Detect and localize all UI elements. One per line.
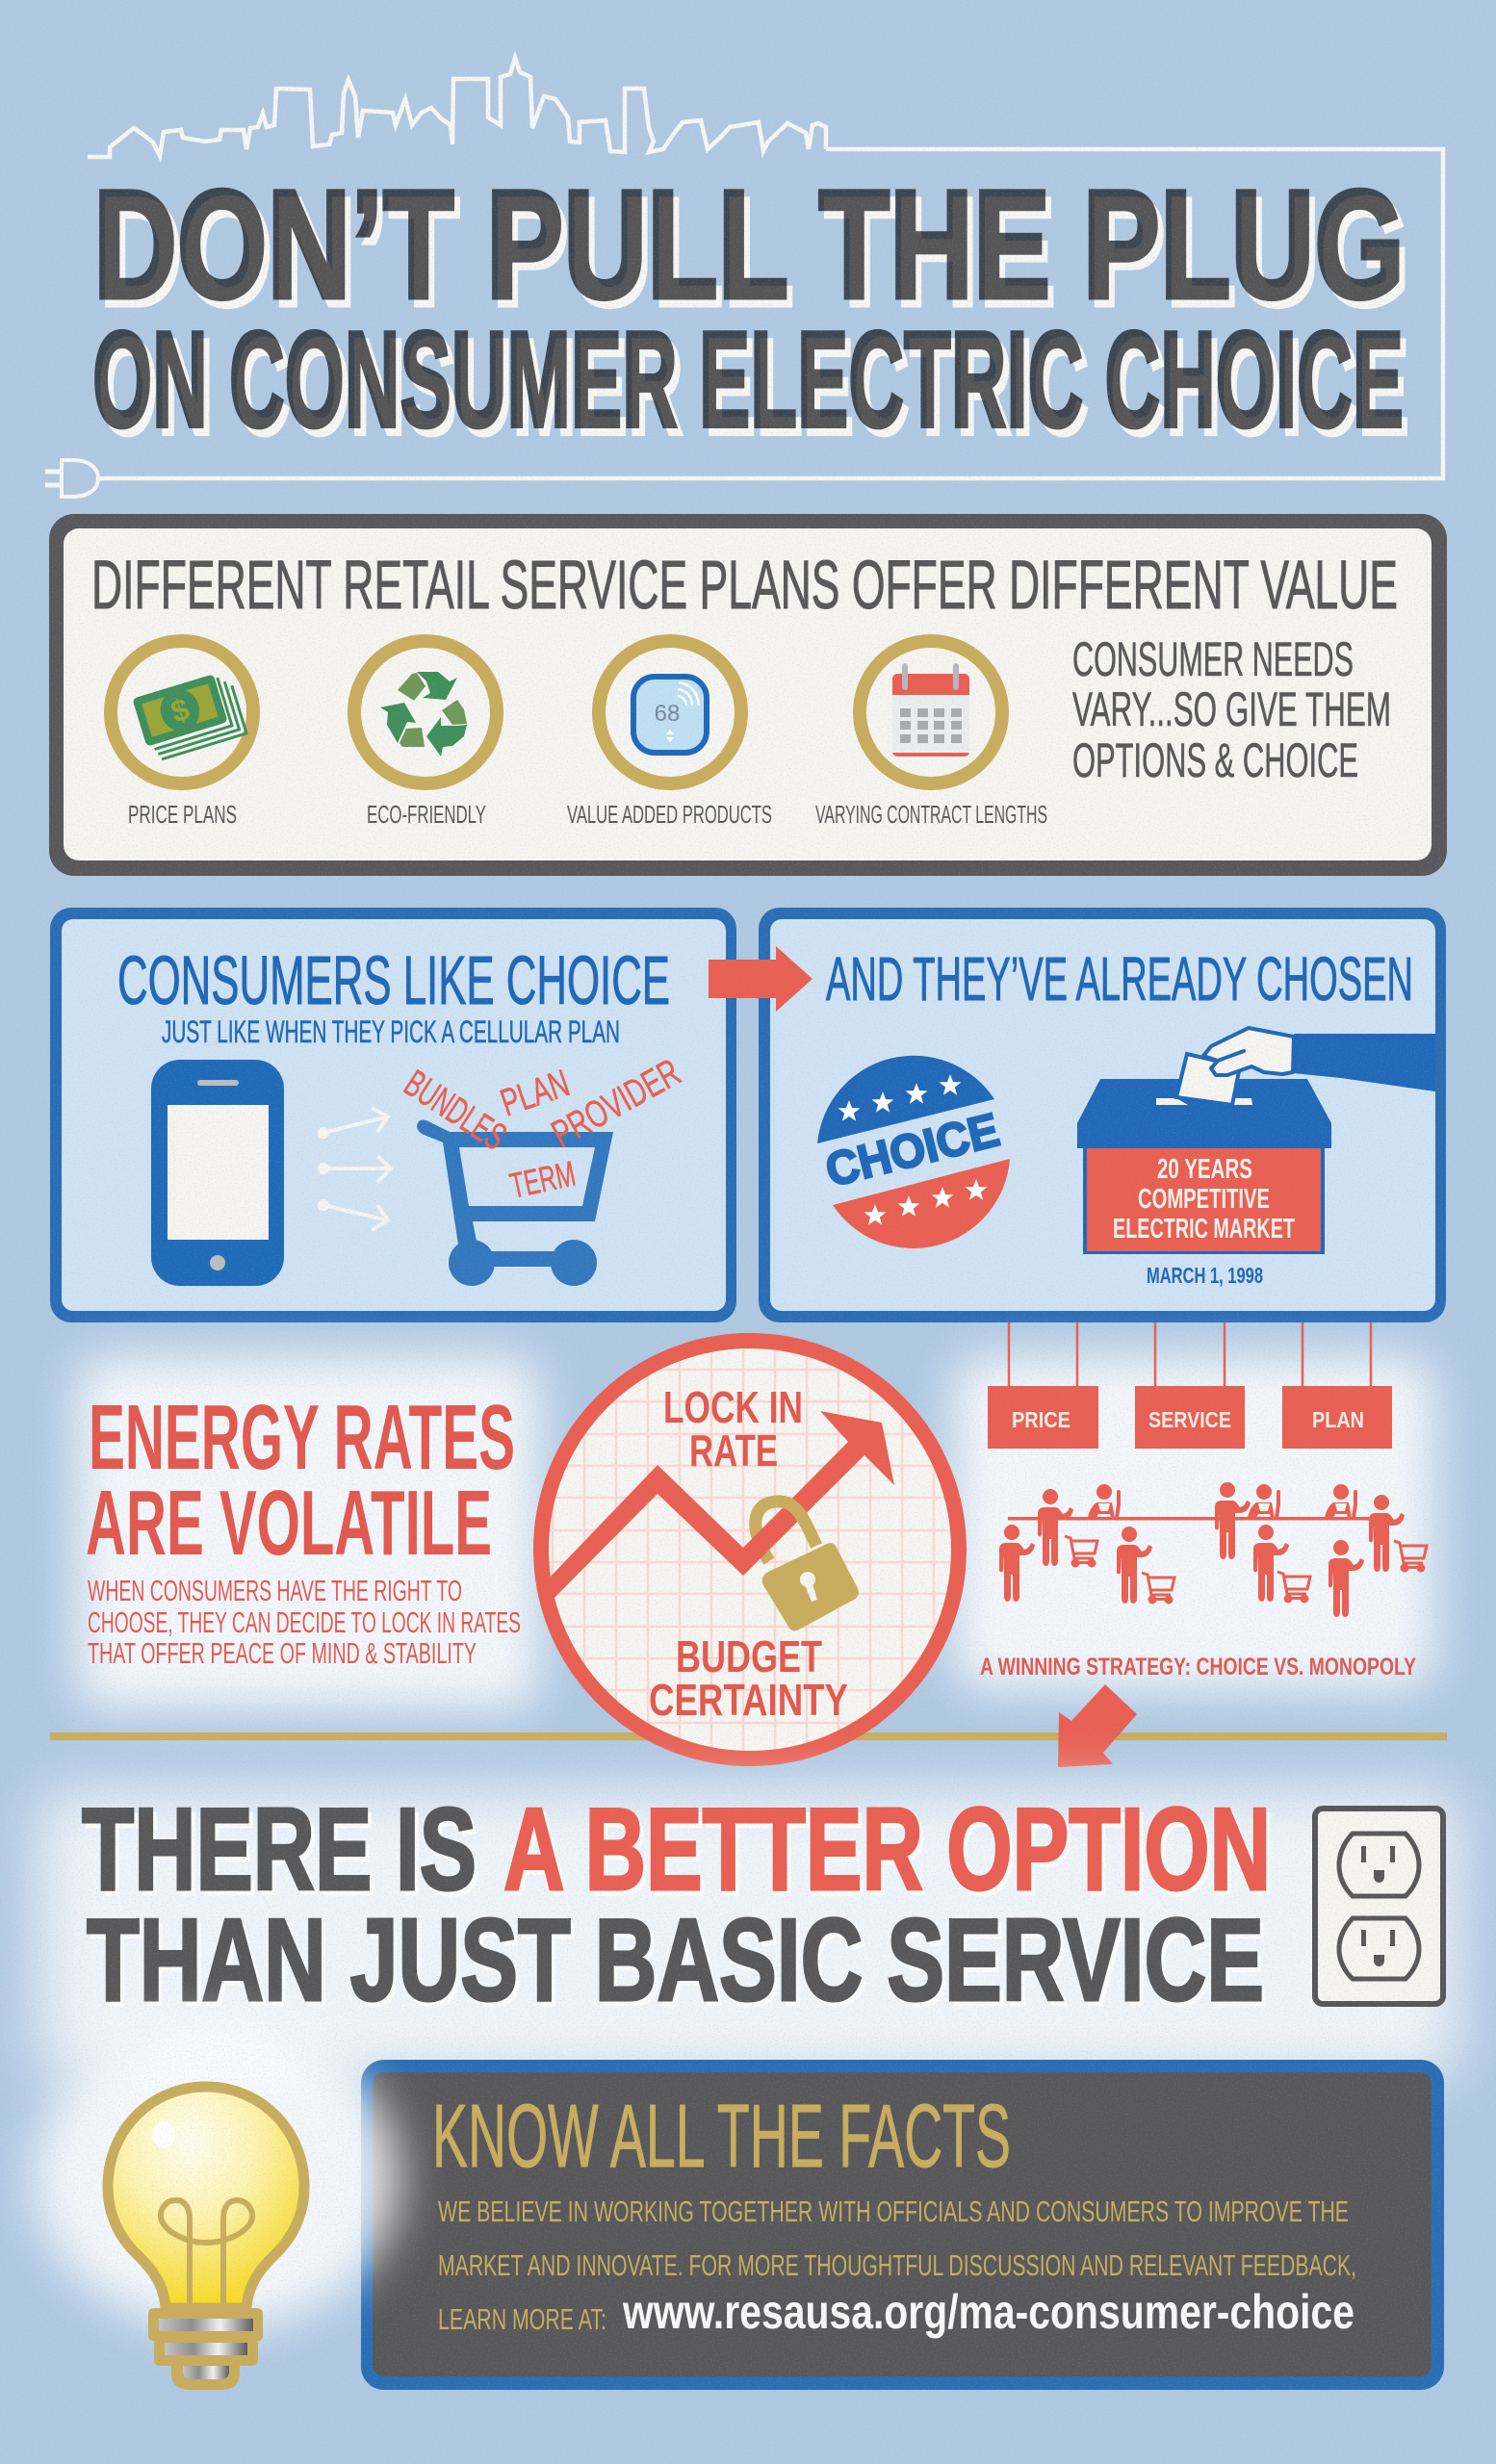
circle captions: BUDGET bbox=[676, 1631, 822, 1681]
icon: shopping cart bbox=[417, 1120, 613, 1286]
icon labels: PRICE PLANS bbox=[128, 800, 237, 829]
circle captions bbox=[649, 1382, 848, 1725]
panel: know all the facts: KNOW ALL THE FACTS bbox=[432, 2086, 1011, 2186]
glow: strategy bbox=[953, 1357, 1434, 1689]
header skyline and cord frame bbox=[45, 58, 1443, 497]
icon: phone bbox=[151, 1060, 284, 1286]
gold divider bbox=[50, 1732, 1447, 1740]
energy rates text: ARE VOLATILE bbox=[86, 1472, 492, 1575]
ballot box text: 20 YEARS bbox=[1157, 1154, 1252, 1185]
icon labels: VALUE ADDED PRODUCTS bbox=[567, 800, 772, 829]
sign boxes: price service plan bbox=[988, 1386, 1392, 1449]
ballot box text bbox=[1113, 1154, 1295, 1245]
better option headline bbox=[82, 1784, 1275, 2030]
panel: know all the facts bbox=[361, 2060, 1444, 2390]
icon labels: VARYING CONTRACT LENGTHS bbox=[815, 800, 1047, 829]
panel: consumers like choice: JUST LIKE WHEN THEY PICK A CELLULAR PLAN bbox=[162, 1014, 620, 1049]
icon: calendar bbox=[860, 641, 1002, 783]
cart words: TERM bbox=[506, 1154, 579, 1206]
panel: consumers like choice bbox=[50, 908, 736, 1322]
energy rates text: WHEN CONSUMERS HAVE THE RIGHT TO bbox=[88, 1574, 462, 1607]
circle captions: CERTAINTY bbox=[649, 1675, 848, 1725]
ballot box text: ELECTRIC MARKET bbox=[1113, 1214, 1295, 1245]
icon: price plans money bbox=[111, 641, 253, 783]
energy rates text: THAT OFFER PEACE OF MIND & STABILITY bbox=[88, 1636, 477, 1670]
icon: recycling bbox=[354, 641, 497, 783]
icon labels: ECO-FRIENDLY bbox=[367, 800, 486, 829]
icon: wall outlet bbox=[1315, 1809, 1443, 2004]
panel: know all the facts: www.resausa.org/ma-consumer-choice bbox=[622, 2285, 1354, 2339]
shoppers and cashiers bbox=[999, 1482, 1427, 1617]
chart circle: lock in rate bbox=[529, 1328, 972, 1771]
better option headline: THERE IS bbox=[82, 1784, 477, 1914]
panel: know all the facts: LEARN MORE AT: bbox=[438, 2302, 606, 2336]
icon: light bulb bbox=[108, 2087, 304, 2390]
sign boxes: price service plan: PLAN bbox=[1312, 1407, 1364, 1432]
date: MARCH 1, 1998 bbox=[1147, 1263, 1263, 1288]
icon: padlock shackle back bbox=[756, 1502, 776, 1561]
arrow down to better option bbox=[1058, 1684, 1137, 1767]
hanging lines to sign boxes bbox=[1009, 1322, 1371, 1386]
icon: padlock bbox=[762, 1502, 859, 1630]
panel: consumers like choice: CONSUMERS LIKE CHOICE bbox=[117, 943, 670, 1019]
cart words: PROVIDER bbox=[545, 1051, 687, 1156]
arrows from phone to cart bbox=[320, 1108, 391, 1230]
icon: thermostat: 68 bbox=[655, 701, 680, 727]
panel: retail service plans bbox=[49, 514, 1447, 876]
icon: thermostat bbox=[599, 641, 741, 783]
sign boxes: price service plan: SERVICE bbox=[1148, 1407, 1231, 1432]
energy rates text bbox=[86, 1386, 521, 1670]
circle captions: LOCK IN bbox=[663, 1382, 803, 1432]
arrow between panels bbox=[709, 946, 812, 1012]
icon: choice badge bbox=[817, 1056, 1010, 1248]
circle captions: RATE bbox=[689, 1425, 778, 1476]
title bbox=[92, 158, 1410, 464]
sign boxes: price service plan: PRICE bbox=[1012, 1407, 1070, 1432]
icon: ballot box bbox=[1077, 1028, 1435, 1254]
cart words: BUNDLES bbox=[397, 1063, 513, 1159]
consumer needs text bbox=[1072, 632, 1391, 787]
panel: already chosen bbox=[759, 908, 1446, 1322]
glow: bulb bbox=[34, 2025, 400, 2329]
energy rates text: CHOOSE, THEY CAN DECIDE TO LOCK IN RATES bbox=[88, 1605, 521, 1639]
cart words: PLAN bbox=[496, 1062, 575, 1125]
ballot box text: COMPETITIVE bbox=[1138, 1184, 1270, 1215]
volatile rate arrow bbox=[547, 1411, 894, 1600]
glow: better option bbox=[39, 1790, 1458, 2079]
cart words bbox=[397, 1051, 687, 1206]
energy rates text: ENERGY RATES bbox=[89, 1386, 515, 1489]
better option headline: THERE IS bbox=[86, 1788, 480, 1919]
icon labels bbox=[128, 800, 1047, 829]
icon: choice badge: CHOICE bbox=[821, 1104, 1004, 1197]
glow: energy rates bbox=[77, 1357, 539, 1708]
icon: price plans money: $ bbox=[167, 691, 193, 730]
